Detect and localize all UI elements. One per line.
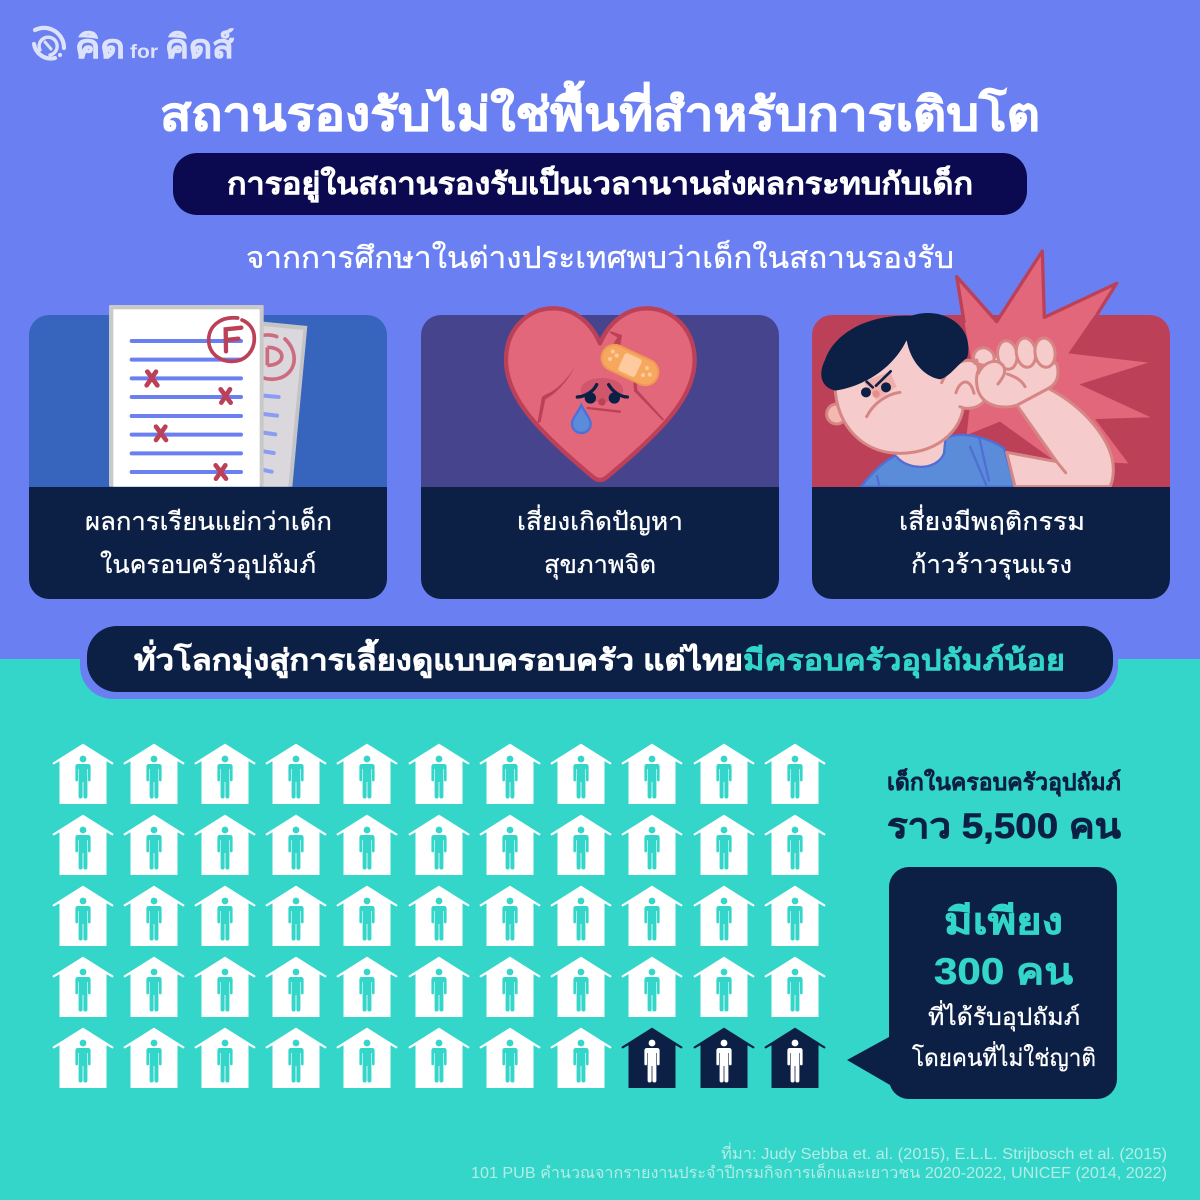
- neck: [897, 440, 945, 466]
- panel background: [812, 315, 1170, 487]
- logo word: คิดส์: คิดส์: [165, 28, 235, 65]
- hair: [821, 313, 968, 391]
- caption: เสี่ยงเกิดปัญหา: [517, 504, 683, 536]
- subtitle text: การอยู่ในสถานรองรับเป็นเวลานานส่งผลกระทบกับเด็ก: [227, 165, 973, 203]
- front paper: [109, 305, 264, 487]
- angry face: [861, 371, 900, 417]
- panel caption band: [421, 487, 779, 599]
- callout number: 300 คน: [934, 951, 1073, 992]
- banner text: teal highlight: มีครอบครัวอุปถัมภ์น้อย: [743, 643, 1065, 678]
- background: teal lower section: [0, 659, 1200, 1200]
- illustration: angry boy with raised fist: [821, 251, 1151, 487]
- caption: [899, 504, 1085, 580]
- face: [835, 340, 964, 453]
- heart cracks: [537, 331, 664, 423]
- section banner: [80, 626, 1118, 699]
- background: periwinkle upper section: [0, 0, 1200, 660]
- source note: ที่มา: Judy Sebba et. al. (2015), E.L.L. Strijbosch et al. (2015): [721, 1142, 1167, 1163]
- stat number: ราว 5,500 คน: [887, 807, 1121, 846]
- caption: [85, 506, 332, 580]
- source note: 101 PUB คำนวณจากรายงานประจำปีกรมกิจการเด็กและเยาวชน 2020-2022, UNICEF (2014, 2022): [471, 1162, 1167, 1182]
- raised arm: [1007, 388, 1113, 487]
- fist: [974, 337, 1058, 407]
- burst: [957, 251, 1151, 463]
- callout line 1: ที่ได้รับอุปถัมภ์: [928, 1000, 1080, 1032]
- pictogram: houses with children: [52, 744, 826, 1088]
- callout line 2: โดยคนที่ไม่ใช่ญาติ: [912, 1041, 1096, 1072]
- source note: [471, 1142, 1167, 1182]
- panel background: [421, 315, 779, 487]
- caption: เสี่ยงมีพฤติกรรม: [899, 504, 1085, 536]
- caption: ผลการเรียนแย่กว่าเด็ก: [85, 506, 332, 536]
- callout heading: มีเพียง: [944, 901, 1063, 942]
- caption: สุขภาพจิต: [544, 551, 656, 580]
- title: สถานรองรับไม่ใช่พื้นที่สำหรับการเติบโต: [160, 80, 1040, 140]
- subtitle pill: [173, 153, 1027, 215]
- caption: [517, 504, 683, 580]
- heart: [506, 308, 695, 480]
- bandage: [597, 341, 663, 389]
- caption: ในครอบครัวอุปถัมภ์: [100, 550, 316, 580]
- panel background: [29, 315, 387, 487]
- back paper: [262, 322, 307, 487]
- panel: poor school results: [29, 305, 387, 599]
- tear drop: [572, 405, 591, 433]
- callout: [847, 867, 1117, 1099]
- banner text: white part: ทั่วโลกมุ่งสู่การเลี้ยงดูแบบครอบครัว แต่ไทย: [134, 638, 743, 678]
- logo word: for: for: [130, 42, 159, 63]
- illustration: graded test papers: [109, 305, 307, 487]
- logo: คิด for คิดส์: [34, 28, 235, 65]
- panel: mental health risk: [421, 308, 779, 599]
- sad face: [577, 378, 627, 412]
- panel caption band: [812, 487, 1170, 599]
- stat label: เด็กในครอบครัวอุปถัมภ์: [887, 767, 1121, 797]
- right ear: [942, 360, 983, 408]
- shirt: [861, 435, 1015, 487]
- intro sentence: จากการศึกษาในต่างประเทศพบว่าเด็กในสถานรองรับ: [246, 239, 954, 275]
- caption: ก้าวร้าวรุนแรง: [911, 551, 1072, 580]
- icon: logo swirl: [34, 28, 64, 59]
- left ear: [827, 404, 847, 424]
- panel caption band: [29, 487, 387, 599]
- logo wordmark: คิด: [75, 28, 125, 65]
- panel: aggressive behaviour risk: [812, 251, 1170, 599]
- illustration: broken heart with bandage: [506, 308, 695, 480]
